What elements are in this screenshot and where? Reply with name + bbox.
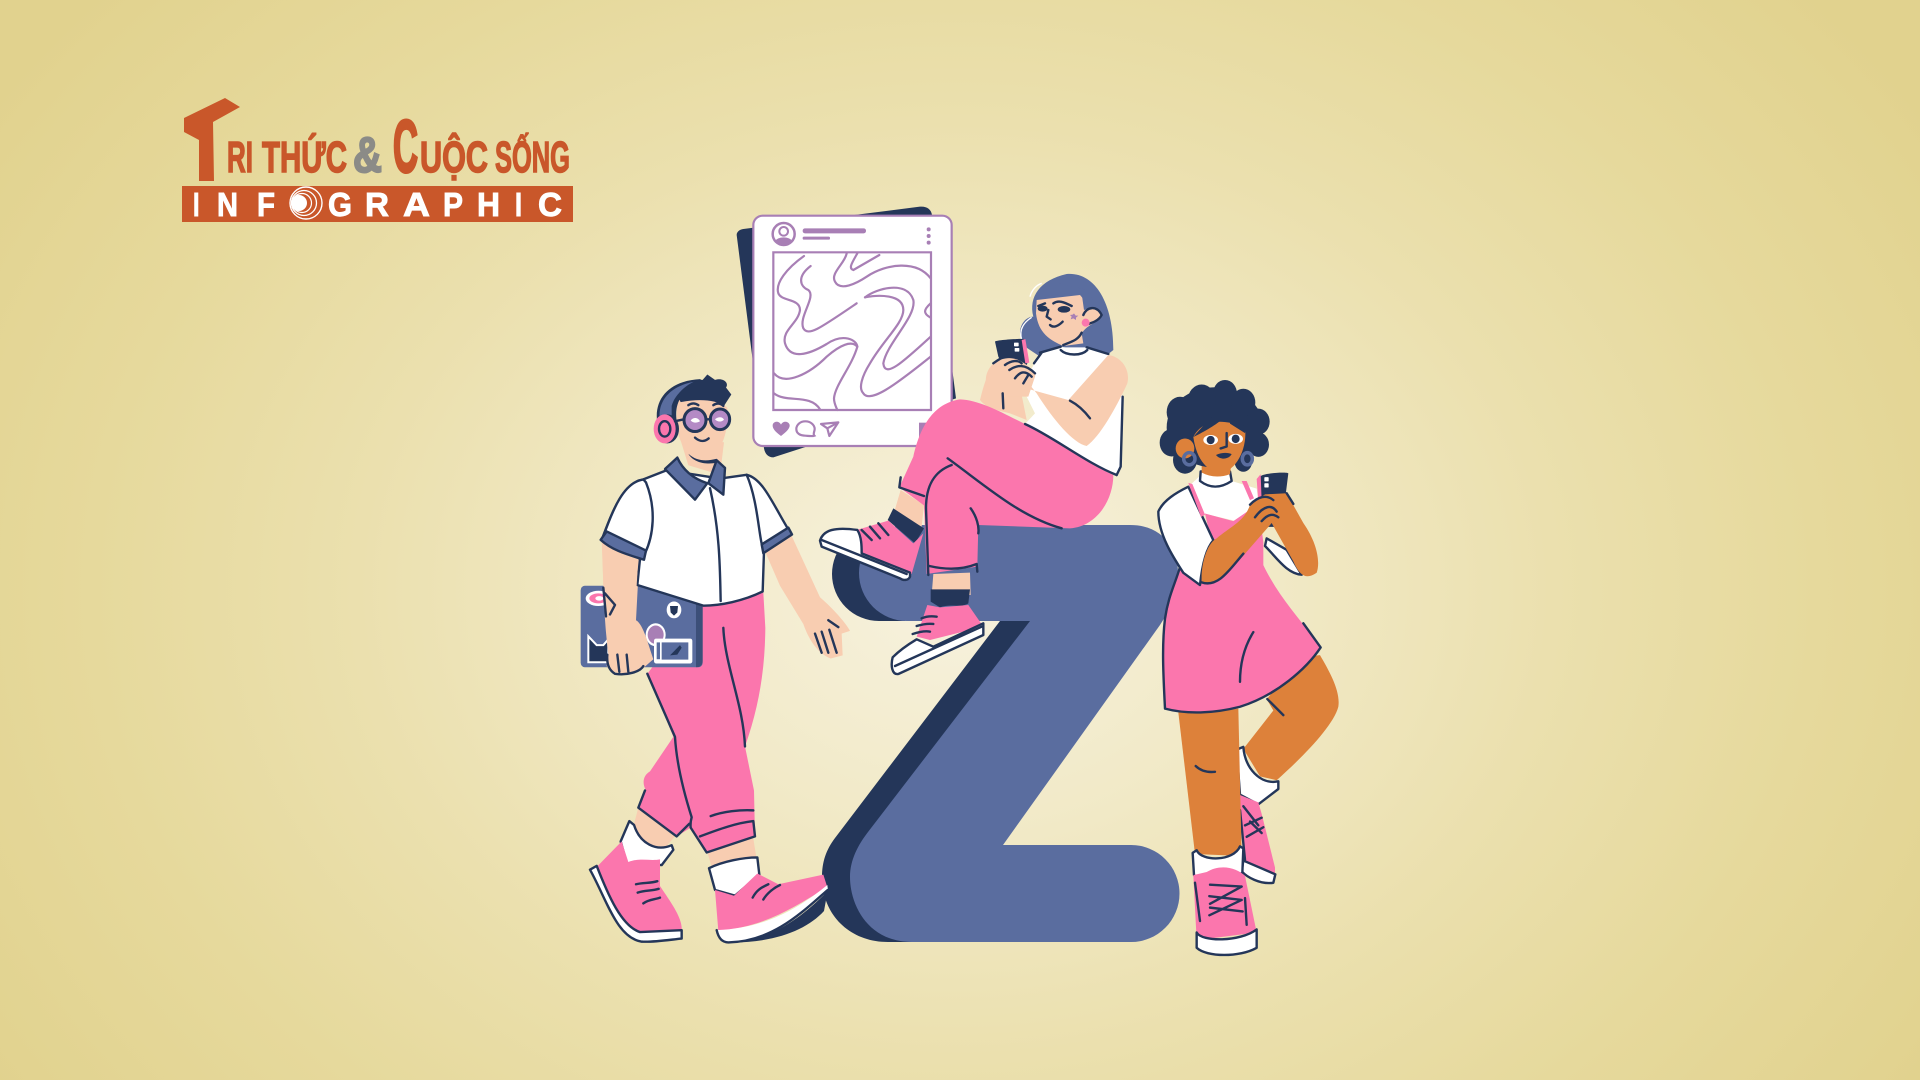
banner text: N <box>217 186 238 223</box>
back shoe <box>1239 795 1275 883</box>
banner text: F <box>257 186 275 223</box>
bangs <box>1035 283 1097 310</box>
face details <box>1193 412 1247 459</box>
shirt <box>1022 347 1123 475</box>
logo wordmark: UỘC <box>420 131 488 182</box>
trouser lines <box>899 424 1117 575</box>
shirt <box>602 470 790 606</box>
headband <box>657 379 708 425</box>
face <box>1193 422 1245 473</box>
hair highlight <box>1021 283 1042 340</box>
logo wordmark: THỨC <box>262 132 347 182</box>
left cuff <box>601 531 646 560</box>
sticker: cat <box>588 636 608 662</box>
banner text: I <box>515 186 522 223</box>
banner text: P <box>443 186 463 223</box>
legs skin <box>632 808 757 867</box>
icon: heart <box>773 422 790 436</box>
laptop <box>581 586 703 667</box>
logo banner <box>182 186 573 222</box>
headphone <box>654 414 679 443</box>
lower shoe <box>892 605 983 674</box>
left sleeve <box>1158 487 1213 585</box>
dress <box>1163 504 1321 712</box>
shirt folds <box>710 475 762 601</box>
sticker: purple hand <box>646 623 666 646</box>
smile <box>695 438 709 441</box>
icon: comment <box>796 421 815 436</box>
banner text: A <box>403 186 430 223</box>
icon: bookmark <box>919 423 933 437</box>
face <box>1036 295 1102 346</box>
logo: Tri Thức & Cuộc Sống Infographic <box>182 98 573 223</box>
character: man with laptop <box>581 375 850 942</box>
face details <box>1038 302 1102 345</box>
arm <box>1202 493 1318 584</box>
face <box>677 393 727 456</box>
front shoe <box>1193 867 1257 955</box>
earrings <box>1184 453 1252 465</box>
front sock <box>1193 846 1243 883</box>
trousers <box>638 593 765 852</box>
ankle skin <box>893 490 971 595</box>
hand lines <box>603 588 643 674</box>
arm <box>980 355 1128 446</box>
post image with squiggles <box>773 252 931 410</box>
banner text: R <box>365 186 389 223</box>
shirt right outline <box>1117 397 1123 475</box>
avatar <box>773 223 795 245</box>
arm crease <box>1070 401 1090 418</box>
neck shadow <box>688 454 717 464</box>
logo wordmark <box>227 105 570 188</box>
banner text: H <box>477 186 500 223</box>
neck <box>681 440 724 475</box>
finger lines <box>815 620 838 653</box>
hand lines <box>1202 493 1293 583</box>
post header lines <box>803 227 931 245</box>
left sock <box>621 821 673 865</box>
banner text: G <box>328 186 352 223</box>
right sock <box>709 857 759 896</box>
glasses <box>675 403 730 432</box>
upper shoe <box>820 521 923 580</box>
collar <box>1200 471 1232 487</box>
knee crease <box>1196 766 1215 772</box>
character: seated girl <box>820 274 1128 674</box>
white top <box>1188 475 1258 521</box>
logo icon: letter T <box>184 98 240 181</box>
straps <box>1188 481 1254 517</box>
Z shadow <box>822 527 1035 942</box>
logo wordmark: & <box>353 127 382 183</box>
hands <box>986 358 1035 397</box>
socks <box>888 508 970 607</box>
dress outline <box>1163 567 1321 712</box>
sticker: pink oval <box>586 591 611 606</box>
hair back <box>1020 274 1113 357</box>
banner text <box>193 186 562 223</box>
phone <box>995 339 1029 392</box>
social media post card <box>737 207 956 457</box>
letter Z <box>822 525 1180 942</box>
front arm <box>603 543 653 674</box>
sticker: shield <box>667 601 681 618</box>
finger lines <box>993 355 1035 408</box>
knee line <box>1267 699 1283 715</box>
cover line <box>602 540 638 586</box>
card <box>753 216 952 446</box>
ear <box>1176 438 1194 458</box>
Z face <box>850 525 1180 942</box>
right shoe <box>715 874 828 942</box>
hair <box>1160 380 1270 474</box>
hair <box>677 375 731 406</box>
trousers <box>899 399 1113 574</box>
headband blue <box>660 381 700 421</box>
left shoe <box>590 841 682 942</box>
character: standing girl with phone <box>1158 380 1339 955</box>
sticker: ticket <box>654 639 692 663</box>
shirt outlines <box>1034 347 1108 363</box>
back sock <box>1237 747 1278 804</box>
icon: send <box>821 422 838 436</box>
logo wordmark: SỐNG <box>495 131 570 182</box>
phone <box>1257 473 1288 527</box>
collar <box>1061 350 1087 354</box>
logo wordmark: RI <box>227 133 253 182</box>
banner text: C <box>538 186 562 223</box>
banner text: I <box>193 186 200 223</box>
logo wordmark: C <box>393 105 418 188</box>
front leg <box>1178 709 1242 856</box>
sleeve <box>603 479 653 553</box>
back sheet <box>737 207 956 457</box>
banner ring icon <box>290 187 322 219</box>
rear arm <box>763 532 850 658</box>
sleeve right <box>1265 538 1302 575</box>
neck <box>1202 462 1232 477</box>
trouser lines <box>638 628 755 852</box>
back leg <box>1243 655 1339 780</box>
collar <box>665 458 725 500</box>
right cuff <box>762 528 792 553</box>
